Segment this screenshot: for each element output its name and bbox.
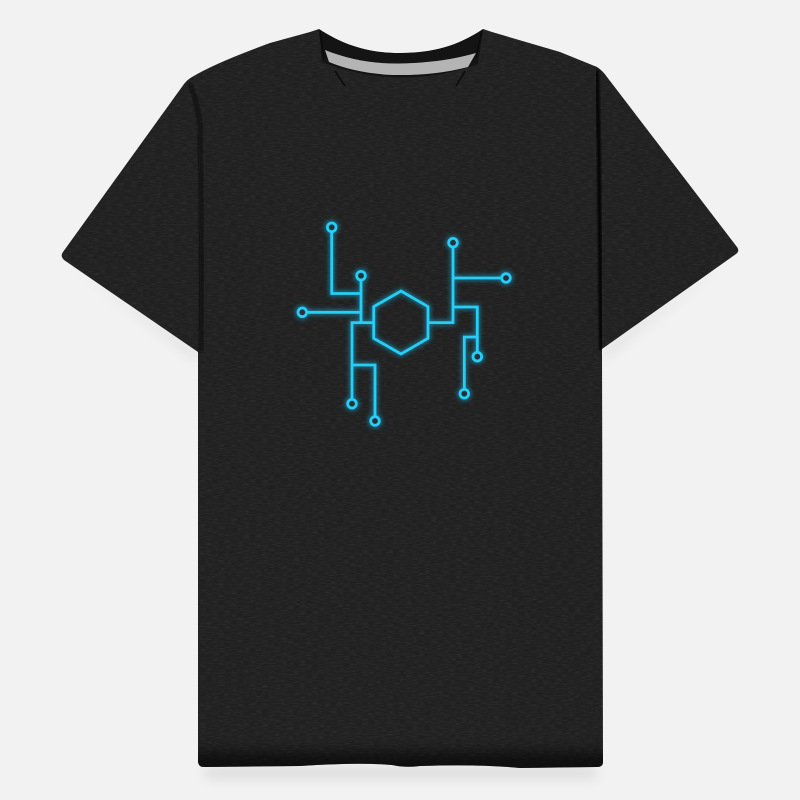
circuit glow (298, 223, 510, 426)
collar inner label band (325, 50, 476, 75)
shirt drop shadow (70, 258, 730, 778)
terminal nodes (298, 223, 510, 425)
fabric texture (69, 32, 736, 754)
hem shading (198, 749, 603, 768)
left traces (302, 227, 375, 421)
circuit graphic (298, 223, 510, 426)
hexagon (374, 291, 428, 354)
right traces (428, 243, 506, 394)
collar inner shadow (319, 29, 483, 78)
sleeve seam: left (190, 84, 201, 352)
sleeve seam: right (597, 70, 601, 350)
t-shirt product illustration (62, 29, 738, 781)
collar seam lines (320, 31, 482, 86)
shirt body (62, 29, 738, 768)
